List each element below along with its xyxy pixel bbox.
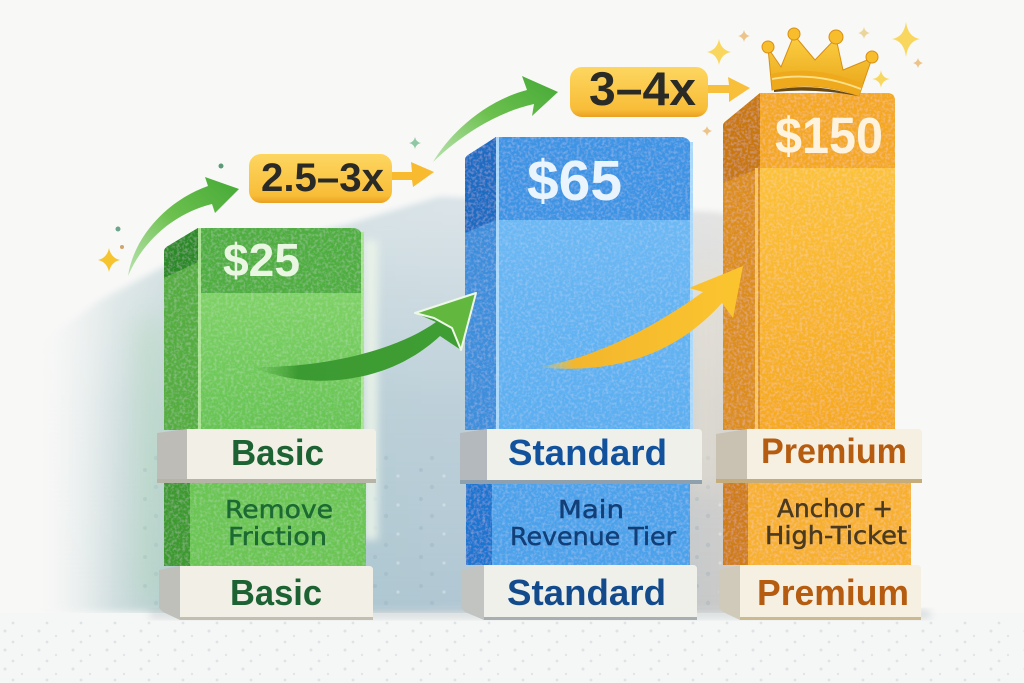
column: Standard (460, 137, 702, 620)
green column body (164, 228, 366, 566)
column: Premium (716, 93, 922, 620)
arrow: green from Basic to Standard (253, 293, 476, 381)
arrow: green rising to 3-4x badge (433, 76, 558, 162)
multiplier badge: 3-4x: 3–4x (589, 62, 696, 115)
price: $150: $150 (775, 107, 883, 164)
upper label band: Basic (157, 429, 376, 483)
descriptor: Anchor + High-Ticket (765, 494, 907, 550)
floor with speckles (0, 610, 1024, 683)
upper label band: Standard: Standard (508, 432, 667, 473)
arrow: green rising to 2.5-3x badge (128, 177, 239, 276)
column: Basic (157, 228, 376, 620)
blue column body (465, 137, 693, 565)
price: $25: $25 (223, 234, 300, 286)
descriptor: Anchor + High-Ticket: Anchor + (777, 494, 893, 523)
descriptor: Main Revenue Tier (510, 495, 677, 551)
icon: golden crown (762, 28, 878, 96)
icon: sparkles near Basic arrow (98, 137, 421, 272)
lower label band: Standard (461, 565, 697, 620)
multiplier badge: 3-4x (570, 62, 750, 117)
price: $65: $65 (527, 149, 622, 213)
icon: sparkles around crown (702, 22, 923, 136)
descriptor: Main Revenue Tier: Revenue Tier (510, 522, 677, 551)
upper label band: Standard (460, 429, 702, 484)
descriptor: Remove Friction: Remove (225, 495, 333, 524)
lower label band: Premium: Premium (757, 572, 909, 613)
orange column body (723, 93, 911, 565)
descriptor: Anchor + High-Ticket: High-Ticket (765, 521, 907, 550)
upper label band: Premium (716, 429, 922, 483)
multiplier badge: 2.5-3x: 2.5–3x (261, 156, 384, 200)
descriptor: Remove Friction: Friction (228, 522, 327, 551)
arrow: yellow from Standard to Premium (537, 266, 743, 369)
lower label band: Premium (719, 565, 921, 620)
upper label band: Premium: Premium (761, 432, 907, 471)
descriptor: Remove Friction (225, 495, 333, 551)
descriptor: Main Revenue Tier: Main (558, 495, 624, 524)
lower label band: Basic: Basic (230, 572, 322, 613)
upper label band: Basic: Basic (231, 432, 324, 473)
lower label band: Basic (159, 566, 373, 620)
multiplier badge: 2.5-3x (249, 154, 434, 203)
lower label band: Standard: Standard (507, 572, 666, 613)
